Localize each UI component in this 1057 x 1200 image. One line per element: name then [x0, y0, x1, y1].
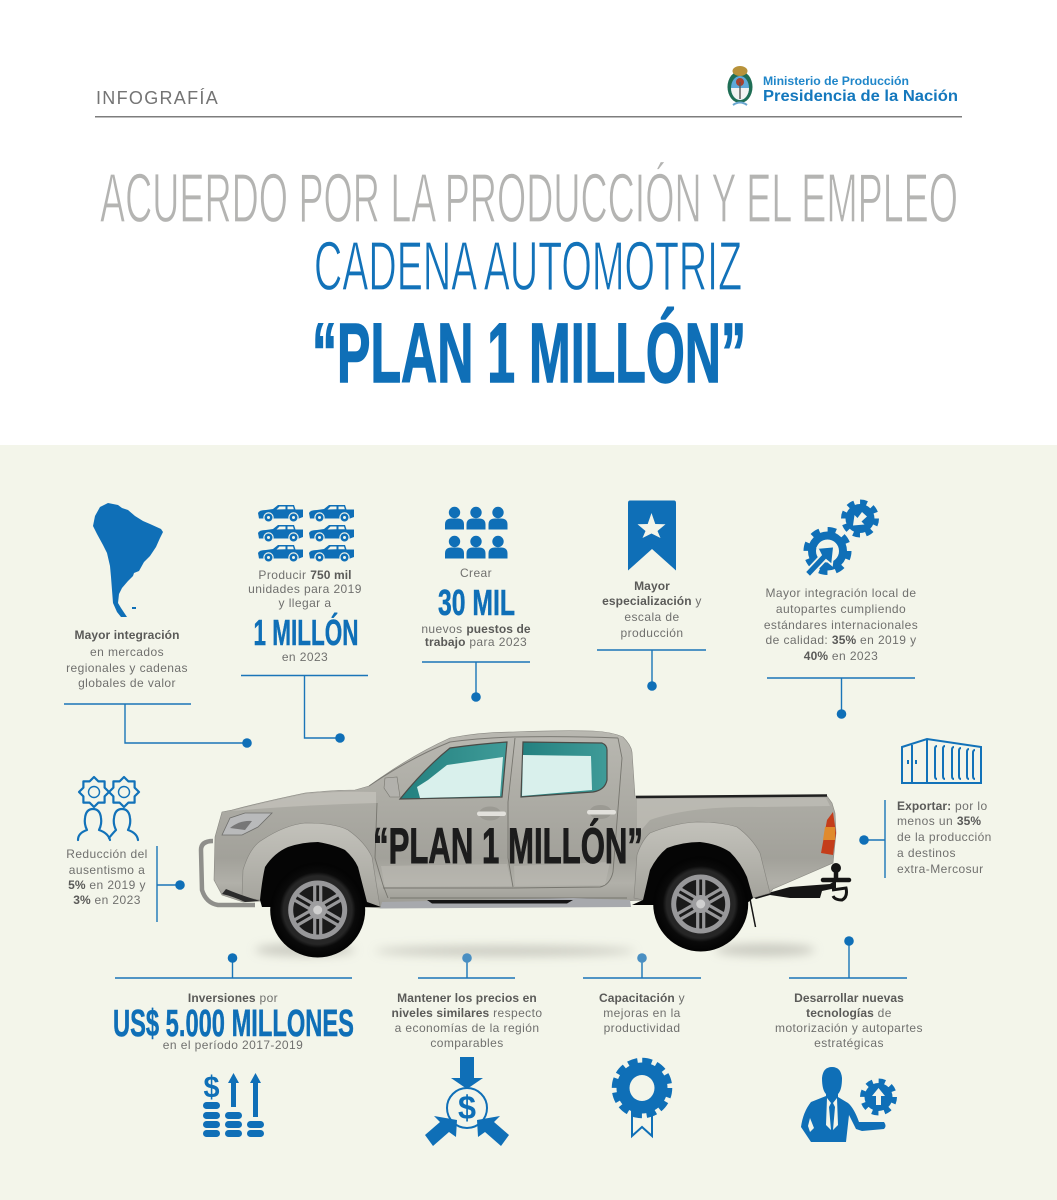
icon: gears with arrows [805, 502, 876, 577]
icon: six pickups [258, 505, 354, 563]
text: especialización [602, 579, 702, 640]
item: technologies [775, 936, 923, 1142]
text: exportar: a destinos [897, 846, 956, 860]
text: capacitación: mejoras en la [603, 1006, 681, 1020]
text: exportar [897, 799, 992, 876]
truck: bumper lower shadow [222, 889, 260, 902]
item: specialization [597, 500, 706, 691]
icon: coins and arrows [203, 1069, 264, 1137]
item: prices [392, 953, 542, 1146]
truck: rear hitch and underside [750, 863, 849, 927]
connector [597, 650, 706, 691]
text: integración local: 40% en 2023 [804, 649, 878, 663]
text: crear: Crear [460, 566, 492, 580]
text: tecnologías: Desarrollar nuevas [794, 991, 904, 1005]
title: “PLAN 1 MILLÓN” [312, 306, 746, 400]
text: ausentismo: Reducción del [66, 847, 148, 861]
icon: dollar with converging arrows [425, 1057, 509, 1146]
truck: bed highlight [637, 798, 830, 835]
icon: dollar with converging arrows: $ [458, 1089, 476, 1126]
item: investment [113, 953, 354, 1137]
text: precios [392, 991, 542, 1050]
item: production target [241, 505, 368, 743]
text: Mayor integración: regionales y cadenas [66, 661, 188, 675]
truck: roof frame shadow [369, 737, 618, 786]
item: absenteeism [66, 777, 185, 922]
text: Mayor integración: globales de valor [78, 676, 176, 690]
item: regional integration [64, 503, 252, 748]
header rule [95, 116, 962, 118]
text: tecnologías [775, 991, 923, 1050]
truck: rear wheel [653, 856, 748, 952]
text: puestos de trabajo [421, 622, 531, 649]
truck: body [214, 731, 836, 908]
text: ausentismo [66, 847, 148, 907]
text: precios: Mantener los precios en [397, 991, 537, 1005]
shadow under truck [255, 944, 815, 956]
logo text: Ministerio de Producción [763, 76, 909, 88]
text: tecnologías: motorización y autopartes [775, 1021, 923, 1035]
header label: INFOGRAFÍA [96, 88, 219, 108]
item: training [583, 953, 701, 1136]
text: especialización: escala de [624, 610, 680, 624]
text: integración local: autopartes cumpliendo [776, 602, 906, 616]
text: Mayor integración: Mayor integración [74, 628, 180, 642]
text: producir: y llegar a [279, 596, 331, 610]
text: integración local [764, 586, 918, 663]
text: capacitación: Capacitación y [599, 991, 685, 1005]
item: jobs [421, 507, 531, 702]
text: especialización: Mayor [634, 579, 670, 593]
text: período: en el período 2017-2019 [163, 1038, 303, 1052]
truck: wheel wells [260, 842, 753, 907]
text: inversiones: Inversiones por [188, 991, 278, 1005]
connector [64, 704, 252, 748]
icon: rosette badge [615, 1061, 669, 1136]
logo text [763, 76, 958, 105]
text: en 2023: en 2023 [282, 650, 328, 664]
text: tecnologías: estratégicas [814, 1036, 884, 1050]
truck: front wheel [270, 862, 365, 958]
icon: Argentine coat of arms [728, 66, 752, 105]
text: ausentismo: 5% en 2019 y [68, 878, 146, 892]
panel: white header background [0, 0, 1057, 445]
icon: businessman with gear [801, 1067, 894, 1142]
icon: people group [445, 507, 508, 558]
truck: running board [380, 898, 631, 908]
truck: front window [400, 742, 507, 799]
text: puestos de trabajo: trabajo para 2023 [425, 635, 527, 649]
truck: hood highlight [232, 792, 376, 811]
text: ausentismo: 3% en 2023 [73, 893, 141, 907]
icon: South America map [93, 503, 163, 617]
text: puestos de trabajo: nuevos puestos de [421, 622, 531, 636]
icon: bookmark with star [628, 500, 676, 570]
figure: 1 millón: 1 MILLÓN [254, 611, 358, 653]
text: precios: niveles similares respecto [392, 1006, 542, 1020]
text: exportar: extra-Mercosur [897, 862, 984, 876]
connector [115, 953, 352, 978]
text: ausentismo: ausentismo a [69, 863, 145, 877]
item: local integration [764, 502, 918, 719]
text: especialización: producción [621, 626, 683, 640]
truck: bed rail [636, 796, 827, 797]
truck: rear fender flare [634, 822, 770, 900]
text: especialización: especialización y [602, 594, 702, 608]
connector [789, 936, 907, 978]
truck: rear window [521, 742, 607, 797]
text: precios: a economías de la región [395, 1021, 539, 1035]
truck: lower door light band [381, 862, 610, 887]
text: capacitación: productividad [604, 1021, 680, 1035]
title: CADENA AUTOMOTRIZ [314, 227, 742, 305]
icon: gears above two people [78, 777, 139, 840]
text: producir [248, 568, 362, 610]
pickup truck illustration [201, 731, 849, 958]
connector [157, 846, 185, 922]
text: integración local: estándares internacionales [764, 618, 918, 632]
truck: mirror [384, 777, 400, 797]
connector [241, 676, 368, 743]
icon: shipping container [902, 739, 981, 783]
truck: door lines [375, 738, 627, 898]
truck: door text: “PLAN 1 MILLÓN” [373, 818, 643, 874]
truck: headlight [222, 813, 272, 835]
text: producir: Producir 750 mil [258, 568, 352, 582]
text: exportar: de la producción [897, 830, 992, 844]
connector [422, 662, 530, 702]
text: integración local: de calidad: 35% en 2019 y [766, 633, 916, 647]
text: Mayor integración: en mercados [90, 645, 164, 659]
truck: front fender flare [242, 823, 380, 907]
figure: 30 mil: 30 MIL [438, 582, 515, 623]
connector [767, 678, 915, 719]
connector [418, 953, 515, 978]
logo text: Presidencia de la Nación [763, 88, 958, 105]
connector [859, 800, 885, 878]
item: export [859, 739, 992, 878]
truck: door handles [477, 805, 616, 820]
truck: tail light [821, 812, 836, 855]
panel: cream content background [0, 445, 1057, 1200]
text: exportar: menos un 35% [897, 814, 981, 828]
figure: US$ 5.000 millones: US$ 5.000 MILLONES [113, 1003, 354, 1045]
text: Mayor integración [66, 628, 188, 690]
text: precios: comparables [430, 1036, 504, 1050]
text: exportar: Exportar: por lo [897, 799, 988, 813]
icon: coins and arrows: $ [204, 1069, 220, 1104]
title [100, 159, 958, 400]
text: producir: unidades para 2019 [248, 582, 362, 596]
text: capacitación [599, 991, 685, 1035]
connector [583, 953, 701, 978]
text: tecnologías: tecnologías de [806, 1006, 892, 1020]
truck: bullbar [201, 841, 255, 905]
text: integración local: Mayor integración local de [766, 586, 916, 600]
